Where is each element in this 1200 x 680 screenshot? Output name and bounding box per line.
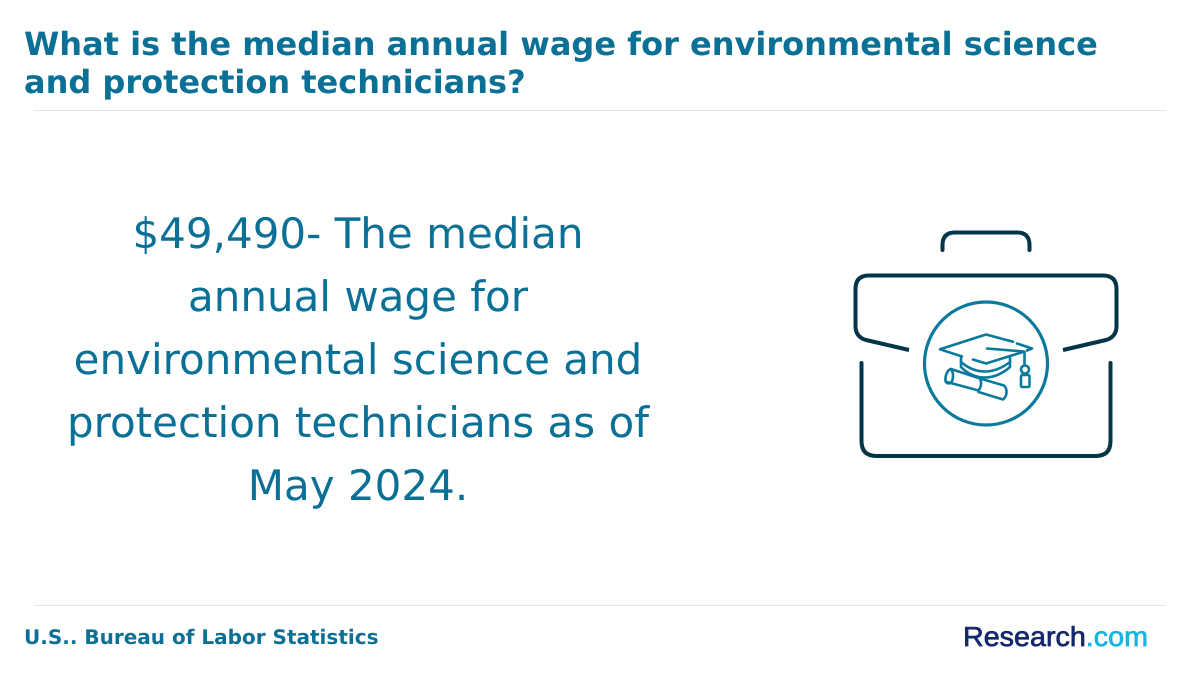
main statement text: May 2024. [248, 461, 468, 510]
circle badge with cap and diploma [924, 302, 1048, 425]
main statement text: environmental science and [74, 335, 642, 384]
graduation cap [940, 334, 1032, 387]
main statement text: annual wage for [188, 272, 528, 321]
title: and protection technicians? [24, 63, 526, 101]
main statement text: $49,490- The median [132, 209, 584, 258]
title: What is the median annual wage for environmental science [24, 25, 1098, 63]
briefcase outline [856, 232, 1116, 456]
logo: Research.com: Research.com [963, 621, 1148, 652]
title [24, 25, 1098, 101]
main statement text: protection technicians as of [67, 398, 649, 447]
source note: U.S.. Bureau of Labor Statistics [24, 625, 378, 649]
main statement text [67, 209, 650, 510]
icon: briefcase with graduation cap [854, 230, 1118, 458]
diploma scroll [945, 369, 1007, 400]
